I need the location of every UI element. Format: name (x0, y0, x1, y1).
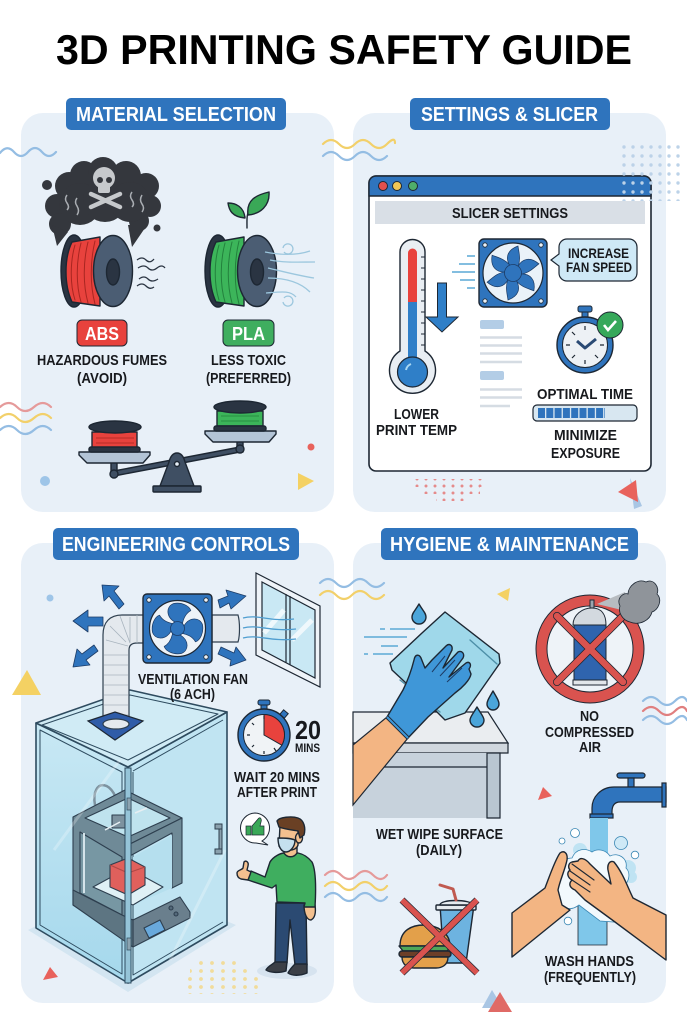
icon: water stream (578, 818, 608, 945)
badge: PLA: PLA (232, 324, 265, 344)
text: wash hands: WASH HANDS (545, 953, 634, 970)
icon: person with mask (237, 817, 317, 979)
badge: ABS (77, 320, 127, 346)
icon: cooling fan (479, 239, 547, 307)
icon: ABS filament spool (61, 235, 132, 307)
icon: table (353, 712, 508, 818)
enclosure door post (54, 760, 225, 983)
settings title bar: SLICER SETTINGS (452, 206, 568, 222)
icon: cooling air lines (452, 256, 475, 288)
icon: faucet (590, 773, 666, 818)
title: 3D PRINTING SAFETY GUIDE (56, 26, 632, 73)
text: minimize exposure: MINIMIZE (554, 427, 617, 444)
text: hazardous fumes (37, 352, 167, 387)
heading: settings and slicer: SETTINGS & SLICER (421, 104, 598, 126)
text: wet wipe surface (376, 826, 503, 859)
text: 20 mins (295, 715, 321, 755)
text: ventilation fan (138, 672, 248, 703)
icon: ducting (88, 615, 240, 740)
icon: door handle (215, 824, 222, 854)
icon: fume squiggles (137, 258, 165, 288)
icon: soap foam and bubbles (552, 828, 639, 925)
icon: window (256, 573, 320, 687)
text: no compressed air: AIR (579, 739, 601, 756)
text: wait 20 mins: AFTER PRINT (237, 785, 317, 801)
heading: material selection: MATERIAL SELECTION (76, 104, 276, 126)
icon: toxic fume cloud with skull (42, 157, 161, 247)
badge: ABS: ABS (85, 324, 119, 344)
heading: hygiene and maintenance (381, 528, 638, 560)
panel: material selection (21, 98, 334, 512)
icon: exhaust air lines (243, 617, 296, 640)
heading: engineering controls: ENGINEERING CONTROLS (62, 534, 290, 556)
icon: airflow arrows (73, 585, 246, 667)
text: ventilation fan: (6 ACH) (170, 687, 215, 703)
text: lower print temp: LOWER (394, 406, 439, 423)
icon: stopwatch with check (557, 306, 623, 373)
text: wet wipe surface: WET WIPE SURFACE (376, 826, 503, 843)
progress bar (533, 405, 637, 421)
text: minimize exposure (551, 427, 620, 462)
callout: increase fan speed: FAN SPEED (566, 259, 632, 275)
heading: engineering controls (53, 528, 299, 560)
heading: hygiene and maintenance: HYGIENE & MAINTENANCE (390, 534, 629, 556)
text: wait 20 mins (234, 770, 320, 801)
window buttons (378, 182, 418, 190)
slicer window (369, 176, 651, 471)
text: less toxic: (PREFERRED) (206, 370, 291, 387)
text: no compressed air: COMPRESSED (545, 724, 634, 741)
text: 20 mins: 20 (295, 715, 321, 745)
text: 20 mins: MINS (295, 743, 320, 755)
callout: increase fan speed (551, 239, 637, 281)
icon: ventilation fan (143, 594, 212, 663)
settings title bar (375, 201, 645, 224)
icon: cleaning cloth (390, 612, 500, 720)
icon: down arrow (426, 283, 458, 332)
text: no compressed air: NO (580, 708, 599, 725)
text: wet wipe surface: (DAILY) (416, 842, 462, 859)
icon: thumbs up bubble (240, 813, 270, 845)
icon: no compressed air (536, 581, 660, 703)
callout: increase fan speed: INCREASE (568, 245, 629, 261)
icon: seedling (228, 192, 269, 228)
text: wash hands: (FREQUENTLY) (544, 969, 636, 986)
text: less toxic: LESS TOXIC (211, 352, 286, 369)
text: hazardous fumes: HAZARDOUS FUMES (37, 352, 167, 369)
panel: settings and slicer (353, 98, 666, 512)
icon: enclosure glass cabinet (28, 690, 236, 992)
text: lower print temp (376, 406, 457, 439)
icon: balance scale with spools (79, 401, 276, 492)
icon: stopwatch twenty minutes (238, 700, 290, 761)
icon: wipe motion lines (364, 629, 415, 654)
text: lower print temp: PRINT TEMP (376, 422, 457, 439)
heading: settings and slicer (410, 98, 610, 130)
icon: thermometer (390, 240, 436, 393)
text: ventilation fan: VENTILATION FAN (138, 672, 248, 688)
icon: washing hands (512, 852, 666, 960)
text: optimal time: OPTIMAL TIME (537, 386, 633, 403)
text: less toxic (206, 352, 291, 387)
icon: PLA filament spool (205, 235, 276, 307)
panel: hygiene and maintenance (353, 528, 666, 1003)
text: hazardous fumes: (AVOID) (77, 370, 127, 387)
text: minimize exposure: EXPOSURE (551, 445, 620, 462)
settings list placeholder (480, 320, 522, 406)
text: no compressed air (545, 708, 634, 756)
icon: clean air lines (265, 244, 315, 306)
icon: spray cloud (597, 581, 660, 623)
icon: water drops (412, 604, 499, 727)
heading: material selection (66, 98, 286, 130)
text: wash hands (544, 953, 636, 986)
icon: 3D printer (73, 785, 190, 947)
icon: no food or drink (399, 885, 477, 973)
panel: engineering controls (21, 528, 334, 1003)
text: wait 20 mins: WAIT 20 MINS (234, 770, 320, 786)
badge: PLA (223, 320, 274, 346)
icon: gloved hand wiping (353, 645, 471, 805)
icon: burger (399, 925, 451, 968)
icon: drink cup (436, 885, 476, 963)
